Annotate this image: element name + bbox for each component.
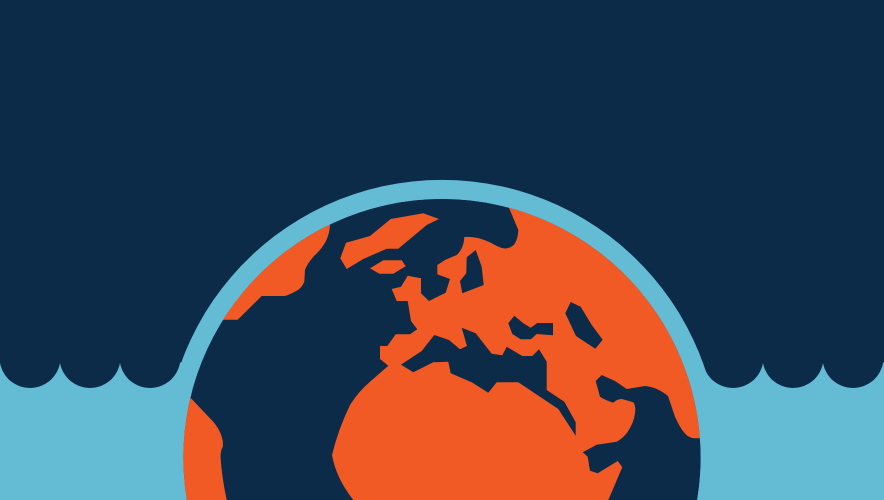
land: greenland <box>340 213 439 269</box>
sea: baltic gulf <box>460 250 484 293</box>
illustration: globe in waves <box>0 180 884 500</box>
land: eurasia and africa <box>332 208 700 500</box>
sea: black sea <box>508 316 553 339</box>
globe <box>170 190 720 500</box>
globe atmosphere ring <box>164 180 720 500</box>
land: north america <box>223 224 330 320</box>
wave scallops: left <box>0 327 180 388</box>
ocean disc <box>183 199 701 500</box>
wave scallops: right <box>702 327 884 388</box>
sea: caspian sea <box>565 302 603 349</box>
sea <box>0 327 884 500</box>
land: iceland <box>370 260 406 274</box>
sea: mediterranean and red sea <box>401 328 576 436</box>
land: south america <box>183 398 227 500</box>
